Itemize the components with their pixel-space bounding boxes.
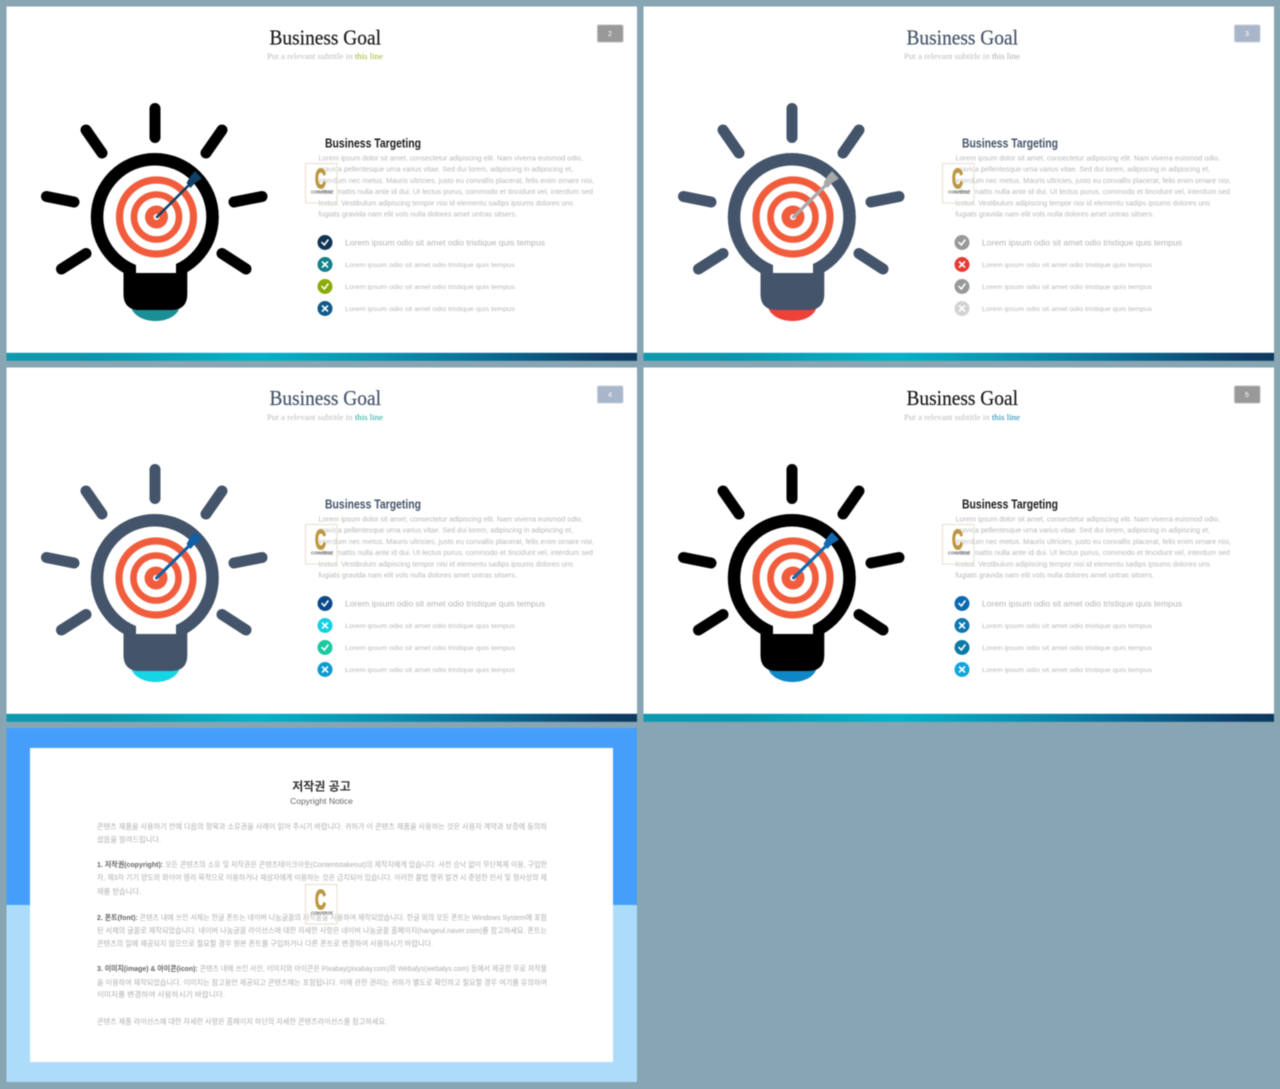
checklist: Lorem ipsum odio sit amet odio tristique quis tempus [345, 306, 516, 313]
checklist: Lorem ipsum odio sit amet odio tristique quis tempus [345, 262, 516, 269]
copyright body text: 자, 제3자 기기 양도와 와이어 영리 목적으로 이용하거나 제삼자에게 이용하는 것은 금지되어 있습니다. 이러한 불법 행위 발견 시 준엄한 민사 및 형사상의 제 [97, 872, 547, 882]
subtitle: Put a relevant subtitle in this line [267, 412, 383, 422]
checklist: Lorem ipsum odio sit amet odio tristique quis tempus [345, 238, 545, 248]
icon: light bulb with target [46, 108, 262, 321]
title: Business Goal [906, 26, 1018, 50]
watermark logo [306, 163, 337, 203]
body text: lectus. Vestibulum adipiscing tempor nisi id elementu sadips ipsums dolores uns [956, 200, 1210, 208]
body text: lectus. Vestibulum adipiscing tempor nisi id elementu sadips ipsums dolores uns [318, 200, 573, 208]
copyright body text [97, 821, 547, 1026]
page number badge: 5 [1245, 392, 1249, 399]
body text: gravida pellentesque urna varius vitae. Sed dui lorem, adipiscing in adipiscing et, [956, 166, 1210, 174]
panel: slide 5 [644, 368, 1274, 722]
body text: Lorem ipsum dolor sit amet, consectetur adipiscing elit. Nam viverra euismod odio, [318, 516, 583, 524]
watermark logo: C [952, 163, 963, 194]
copyright body text: 콘텐츠 제품 라이선스에 대한 자세한 사항은 홈페이지 하단의 자세한 콘텐츠라이선스를 참고하세요. [97, 1016, 387, 1026]
copyright body text: 3. 이미지(image) & 아이콘(icon): 콘텐츠 내에 쓰인 사진, 이미지와 아이콘은 Pixabay(pixabay.com)와 Webalys(webalys.com) 등에서 제공한 무료 저작물 [97, 963, 547, 973]
title: Business Goal [270, 386, 381, 410]
body text [956, 156, 1231, 218]
watermark logo: C [315, 163, 326, 194]
checklist: Lorem ipsum odio sit amet odio tristique quis tempus [982, 667, 1153, 674]
copyright body text: 1. 저작권(copyright): 모든 콘텐츠의 소유 및 저작권은 콘텐츠테이크아웃(Contentstakeout)의 제작자에게 있습니다. 사전 승낙 없이 무단복제 이용, 구입한 [97, 859, 547, 869]
watermark logo: C [952, 524, 963, 555]
title: Business Goal [270, 26, 381, 50]
checklist: Lorem ipsum odio sit amet odio tristique quis tempus [345, 645, 516, 652]
copyright title: 저작권 공고 [292, 778, 351, 794]
heading: Business Targeting [325, 136, 421, 150]
copyright body text: 콘텐츠 제품을 사용하기 전에 다음의 항목과 소유권을 사례이 읽어 주시기 바랍니다. 귀하가 이 콘텐츠 제품을 사용하는 것은 사용자 계약과 보증에 동의하 [97, 821, 547, 831]
page number badge [1234, 386, 1260, 403]
body text: lectus. Vestibulum adipiscing tempor nisi id elementu sadips ipsums dolores uns [956, 562, 1210, 568]
icon: light bulb with target [46, 470, 262, 682]
watermark logo: CONVERSE [311, 190, 333, 194]
checklist [954, 596, 1182, 677]
icon: light bulb with target [684, 108, 899, 321]
copyright body text: 콘텐츠의 일에 제공되지 않으므로 필요할 경우 원본 폰트를 구입하거나 다른 폰트로 변경하여 사용하시기 바랍니다. [97, 938, 433, 948]
body text [318, 516, 594, 580]
checklist: Lorem ipsum odio sit amet odio tristique quis tempus [982, 284, 1153, 291]
body text: Lorem ipsum dolor sit amet, consectetur adipiscing elit. Nam viverra euismod odio, [956, 516, 1220, 524]
page number badge [598, 25, 623, 42]
body text [956, 516, 1231, 580]
panel: slide 4 [6, 368, 637, 722]
body text: interdum nec metus. Mauris ultricies, justo eu convallis placerat, felis enim ornare nisi, [956, 178, 1231, 185]
checklist [954, 235, 1182, 316]
footer band [644, 714, 1274, 722]
body text: vitae mattis nulla ante id dui. Ut lectus purus, commodo et tincidunt vel, interdum sed [956, 189, 1230, 196]
body text: gravida pellentesque urna varius vitae. Sed dui lorem, adipiscing in adipiscing et, [318, 528, 573, 534]
subtitle: Put a relevant subtitle in this line [267, 51, 383, 61]
panel: copyright notice [6, 728, 637, 1082]
copyright body text: 이미지를 변경하여 사용하시기 바랍니다. [97, 989, 225, 999]
checklist: Lorem ipsum odio sit amet odio tristique quis tempus [982, 306, 1153, 313]
body text: fugiats gravida nam elit vols nulla dolores amet untras sitsers. [318, 572, 517, 580]
checklist: Lorem ipsum odio sit amet odio tristique quis tempus [982, 262, 1153, 269]
checklist [318, 235, 545, 316]
copyright body text: 2. 폰트(font): 콘텐츠 내에 쓰인 서체는 한글 폰트는 네이버 나눔글꼴의 저작물을 사용하여 제작되었습니다. 한글 외의 모든 폰트는 Windows System에 포함 [97, 912, 547, 922]
body text: lectus. Vestibulum adipiscing tempor nisi id elementu sadips ipsums dolores uns [318, 562, 573, 568]
checklist: Lorem ipsum odio sit amet odio tristique quis tempus [345, 623, 516, 630]
body text: fugiats gravida nam elit vols nulla dolores amet untras sitsers. [956, 572, 1154, 580]
checklist: Lorem ipsum odio sit amet odio tristique quis tempus [982, 598, 1182, 608]
watermark logo: CONVERSE [311, 910, 333, 916]
title: Business Goal [906, 386, 1018, 410]
page number badge: 3 [1245, 31, 1249, 38]
watermark logo [306, 884, 337, 924]
checklist: Lorem ipsum odio sit amet odio tristique quis tempus [982, 623, 1153, 630]
watermark logo: CONVERSE [948, 190, 970, 194]
checklist: Lorem ipsum odio sit amet odio tristique quis tempus [345, 284, 516, 291]
heading: Business Targeting [962, 498, 1058, 512]
checklist: Lorem ipsum odio sit amet odio tristique quis tempus [982, 238, 1182, 248]
body text: Lorem ipsum dolor sit amet, consectetur adipiscing elit. Nam viverra euismod odio, [318, 156, 583, 162]
copyright body text: 된 서체의 글꼴로 제작되었습니다. 네이버 나눔글꼴 라이선스에 대한 자세한 사항은 네이버 나눔글꼴 홈페이지(hangeul.naver.com)를 참고하세요. 폰트는 [97, 925, 547, 935]
watermark logo [942, 524, 974, 564]
copyright body text: 셨음을 알려드립니다. [97, 834, 161, 844]
checklist [318, 596, 545, 677]
body text: Lorem ipsum dolor sit amet, consectetur adipiscing elit. Nam viverra euismod odio, [956, 156, 1220, 162]
body text: fugiats gravida nam elit vols nulla dolores amet untras sitsers. [956, 212, 1154, 218]
body text: vitae mattis nulla ante id dui. Ut lectus purus, commodo et tincidunt vel, interdum sed [318, 550, 593, 557]
body text: vitae mattis nulla ante id dui. Ut lectus purus, commodo et tincidunt vel, interdum sed [318, 189, 593, 196]
checklist: Lorem ipsum odio sit amet odio tristique quis tempus [982, 645, 1153, 652]
watermark logo [942, 163, 974, 203]
footer band [644, 353, 1274, 361]
watermark logo: C [315, 524, 326, 555]
body text: gravida pellentesque urna varius vitae. Sed dui lorem, adipiscing in adipiscing et, [318, 166, 573, 174]
body text: interdum nec metus. Mauris ultricies, justo eu convallis placerat, felis enim ornare nisi, [956, 539, 1231, 546]
page number badge: 2 [608, 31, 612, 38]
heading: Business Targeting [962, 136, 1058, 150]
page number badge [1234, 25, 1260, 42]
checklist: Lorem ipsum odio sit amet odio tristique quis tempus [345, 667, 516, 674]
icon: light bulb with target [684, 470, 899, 682]
body text: interdum nec metus. Mauris ultricies, justo eu convallis placerat, felis enim ornare nisi, [318, 178, 594, 185]
subtitle: Put a relevant subtitle in this line [904, 51, 1020, 61]
footer band [6, 714, 637, 722]
body text: interdum nec metus. Mauris ultricies, justo eu convallis placerat, felis enim ornare nisi, [318, 539, 594, 546]
copyright body text: 을 이용하여 제작되었습니다. 이미지는 참고용만 제공되고 콘텐츠에는 포함됩니다. 이에 관한 권리는 귀하가 별도로 확인하고 필요할 경우 여기를 유의하여 [97, 977, 547, 987]
panel: slide 2 [6, 6, 637, 361]
body text: gravida pellentesque urna varius vitae. Sed dui lorem, adipiscing in adipiscing et, [956, 528, 1210, 534]
copyright subtitle: Copyright Notice [290, 796, 353, 806]
body text: vitae mattis nulla ante id dui. Ut lectus purus, commodo et tincidunt vel, interdum sed [956, 550, 1230, 557]
panel: slide 3 [644, 6, 1274, 361]
subtitle: Put a relevant subtitle in this line [904, 412, 1020, 422]
copyright body text: 재를 받습니다. [97, 886, 141, 896]
page number badge [598, 386, 623, 403]
watermark logo [306, 524, 337, 564]
watermark logo: CONVERSE [948, 550, 970, 556]
footer band [6, 353, 637, 361]
watermark logo: C [315, 884, 326, 915]
checklist: Lorem ipsum odio sit amet odio tristique quis tempus [345, 598, 545, 608]
body text [318, 156, 594, 218]
watermark logo: CONVERSE [311, 550, 333, 556]
heading: Business Targeting [325, 498, 421, 512]
page number badge: 4 [608, 392, 612, 399]
body text: fugiats gravida nam elit vols nulla dolores amet untras sitsers. [318, 212, 517, 218]
